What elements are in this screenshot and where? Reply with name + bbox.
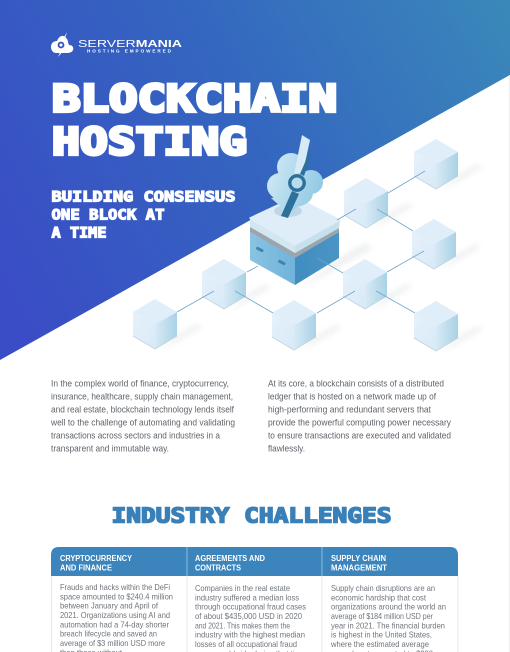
column 3 text: is highest in the United States, — [331, 631, 432, 640]
header dividers — [187, 547, 322, 576]
subtitle: A TIME — [52, 225, 106, 241]
intro paragraph right: high-performing and redundant servers that — [268, 404, 431, 414]
intro paragraph right: to ensure transactions are executed and validated — [268, 430, 451, 440]
logo wordmark: SERVER MANIA — [78, 39, 182, 50]
central server — [250, 197, 372, 290]
subtitle: ONE BLOCK AT — [52, 207, 165, 223]
column 2 text: Companies in the real estate — [195, 584, 290, 593]
connector lines — [177, 171, 425, 313]
intro paragraph left: In the complex world of finance, cryptocurrency, — [51, 378, 229, 388]
column 2 text: of about $435,000 USD in 2020 — [195, 612, 302, 621]
column 3 text: average of $184 million USD per — [331, 612, 433, 621]
subtitle: BUILDING CONSENSUS — [52, 189, 236, 205]
column 1 — [60, 553, 173, 652]
column 3 text: year in 2021. The financial burden — [331, 621, 445, 630]
column 1 text: 2021. Organizations using AI and — [60, 611, 170, 620]
column 2 text: through occupational fraud cases — [195, 603, 306, 612]
column 3 heading — [331, 553, 388, 572]
intro paragraph left: transactions across sectors and industries in a — [51, 430, 221, 440]
column 2 heading: CONTRACTS — [195, 562, 241, 572]
column 2 text — [195, 584, 306, 652]
column 1 heading: CRYPTOCURRENCY — [60, 553, 132, 563]
intro paragraph right — [268, 378, 451, 454]
intro paragraph left: transparent and immutable way. — [51, 442, 169, 454]
column 1 text: between January and April of — [60, 602, 159, 611]
title: HOSTING — [52, 120, 247, 163]
column 3 text: where the estimated average — [330, 640, 429, 649]
column 2 text: losses of all occupational fraud — [195, 640, 297, 649]
heading: industry challenges: INDUSTRY CHALLENGES — [112, 503, 392, 527]
title: BLOCKCHAIN — [52, 77, 337, 120]
table — [51, 547, 458, 652]
column 3 text: economic hardship that cost — [331, 593, 427, 602]
column 2 — [195, 553, 306, 652]
column 1 text — [60, 583, 173, 652]
column 1 text: average of $3 million USD more — [60, 639, 165, 648]
column 2 heading — [195, 553, 265, 572]
logo — [51, 32, 182, 57]
network illustration — [133, 135, 483, 353]
column 1 text: space amounted to $240.4 million — [60, 592, 173, 601]
column 1 text: Frauds and hacks within the DeFi — [60, 583, 170, 592]
intro paragraph right: ledger that is hosted on a network made up of — [268, 390, 436, 402]
icon: cloud with key — [267, 135, 323, 218]
column 3 text: organizations around the world an — [331, 603, 446, 612]
title — [52, 77, 337, 163]
intro paragraph left — [50, 378, 235, 454]
banner background — [0, 0, 510, 360]
intro paragraph right: provide the powerful computing power necessary — [268, 416, 451, 428]
column 3 heading: SUPPLY CHAIN — [331, 553, 386, 563]
column 2 text: industry suffered a median loss — [195, 593, 299, 602]
column 1 text: automation had a 74-day shorter — [60, 620, 169, 629]
intro paragraph left: insurance, healthcare, supply chain management, — [51, 390, 233, 402]
cube nodes — [133, 139, 483, 353]
column 3 heading: MANAGEMENT — [331, 562, 388, 572]
intro paragraph right: At its core, a blockchain consists of a distributed — [268, 378, 444, 388]
intro paragraph left: well to the challenge of automating and validating — [50, 416, 235, 428]
column 3 text — [330, 584, 446, 652]
table header bar — [51, 547, 458, 576]
column 2 heading: AGREEMENTS AND — [195, 553, 265, 563]
icon: logo cloud — [51, 32, 73, 57]
intro paragraph right: flawlessly. — [268, 442, 305, 454]
column 1 text: breach lifecycle and saved an — [60, 630, 157, 639]
column 1 heading — [60, 553, 132, 572]
column 3 — [330, 553, 446, 652]
column 3 text: Supply chain disruptions are an — [331, 584, 435, 593]
column 2 text: industry with the highest median — [195, 631, 305, 640]
column 1 heading: AND FINANCE — [60, 562, 112, 572]
table body outline — [52, 576, 458, 652]
page edge — [509, 75, 510, 652]
column 2 text: and 2021. This makes them the — [195, 621, 290, 630]
intro paragraph left: and real estate, blockchain technology lends itself — [51, 404, 234, 414]
logo tagline: HOSTING EMPOWERED — [87, 48, 172, 54]
subtitle — [52, 189, 236, 241]
